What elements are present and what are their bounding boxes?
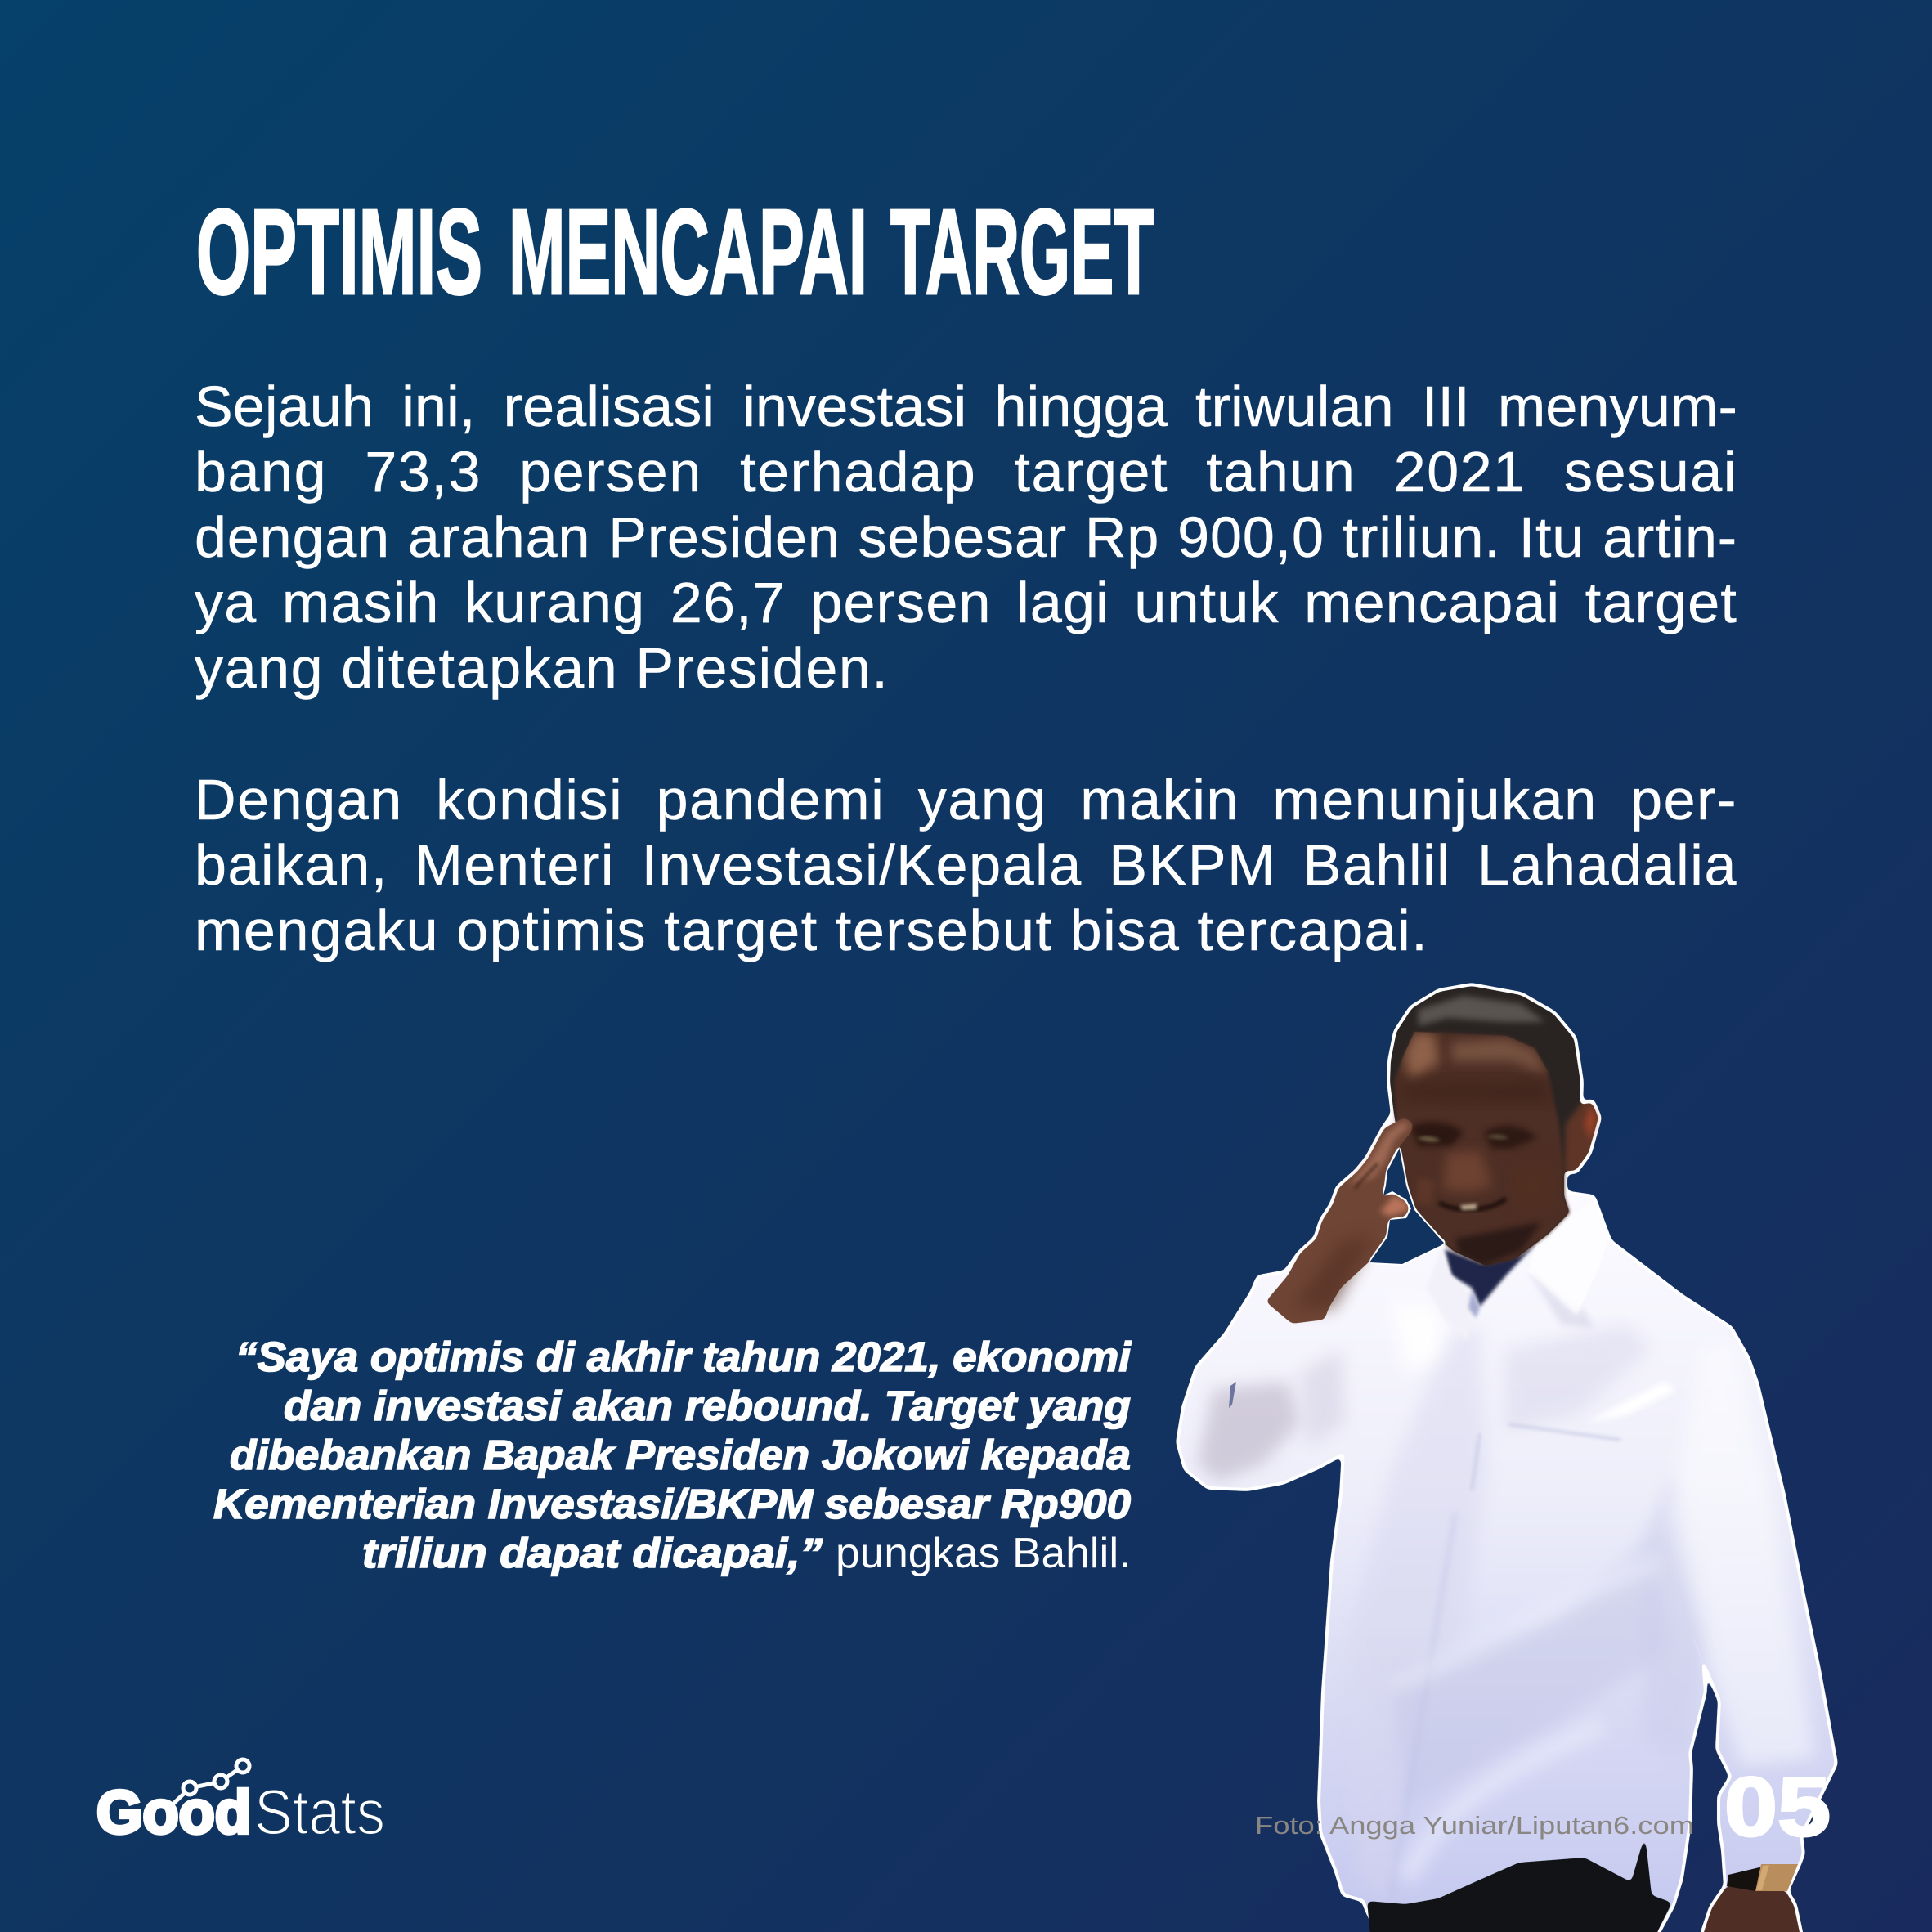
saluting hand bbox=[1266, 1118, 1413, 1324]
title: OPTIMIS bbox=[196, 185, 482, 320]
quote from Bahlil: “Saya optimis di akhir tahun 2021, ekonomi bbox=[235, 1334, 1132, 1380]
paragraph: investment realization: Sejauh ini, realisasi investasi hingga triwulan III menyum- bbox=[195, 374, 1737, 438]
quote from Bahlil: dan investasi akan rebound. Target yang bbox=[284, 1383, 1131, 1429]
quote from Bahlil: dibebankan Bapak Presiden Jokowi kepada bbox=[230, 1432, 1131, 1478]
white cut-out outline bbox=[1179, 986, 1835, 1932]
paragraph: investment realization bbox=[195, 374, 1737, 700]
quote from Bahlil bbox=[213, 1334, 1132, 1577]
paragraph: investment realization: dengan arahan Presiden sebesar Rp 900,0 triliun. Itu artin- bbox=[195, 505, 1737, 569]
inner neck shadow bbox=[1445, 1243, 1537, 1307]
head and hair bbox=[1390, 986, 1598, 1266]
GoodStats logo: Good bbox=[96, 1778, 251, 1846]
ear bbox=[1564, 1102, 1598, 1171]
paragraph: minister optimism bbox=[195, 768, 1737, 962]
title: MENCAPAI bbox=[509, 185, 867, 320]
paragraph: investment realization: yang ditetapkan Presiden. bbox=[195, 636, 889, 700]
face bbox=[1394, 1032, 1570, 1266]
hair highlights bbox=[1419, 996, 1545, 1026]
photo credit: Foto: Angga Yuniar/Liputan6.com bbox=[1255, 1811, 1694, 1840]
paragraph: investment realization: bang 73,3 persen terhadap target tahun 2021 sesuai bbox=[195, 440, 1737, 504]
GoodStats logo: Stats bbox=[254, 1776, 385, 1848]
photo: Bahlil Lahadalia saluting bbox=[1179, 986, 1835, 1932]
shirt bbox=[1179, 986, 1835, 1932]
paragraph: minister optimism: Dengan kondisi pandemi yang makin menunjukan per- bbox=[195, 768, 1737, 832]
title bbox=[196, 185, 1154, 320]
GoodStats logo bbox=[96, 1759, 385, 1848]
page number: 05 bbox=[1724, 1760, 1831, 1854]
quote from Bahlil: pungkas Bahlil. bbox=[836, 1530, 1131, 1577]
title: TARGET bbox=[890, 185, 1154, 320]
quote from Bahlil: triliun dapat dicapai,” bbox=[362, 1530, 823, 1576]
ear highlight bbox=[1585, 1105, 1597, 1141]
wrist and watch bbox=[1697, 1864, 1805, 1932]
quote from Bahlil: Kementerian Investasi/BKPM sebesar Rp900 bbox=[213, 1481, 1131, 1527]
paragraph: minister optimism: baikan, Menteri Investasi/Kepala BKPM Bahlil Lahadalia bbox=[195, 833, 1737, 897]
eyes bbox=[1417, 1136, 1441, 1141]
trousers bbox=[1367, 1834, 1672, 1932]
gap between hand and face bbox=[1369, 1146, 1446, 1264]
paragraph: minister optimism: mengaku optimis target tersebut bisa tercapai. bbox=[195, 899, 1428, 962]
shirt folds and shading bbox=[1198, 1300, 1815, 1905]
collar bbox=[1427, 1202, 1607, 1341]
paragraph: investment realization: ya masih kurang 26,7 persen lagi untuk mencapai target bbox=[195, 571, 1737, 634]
